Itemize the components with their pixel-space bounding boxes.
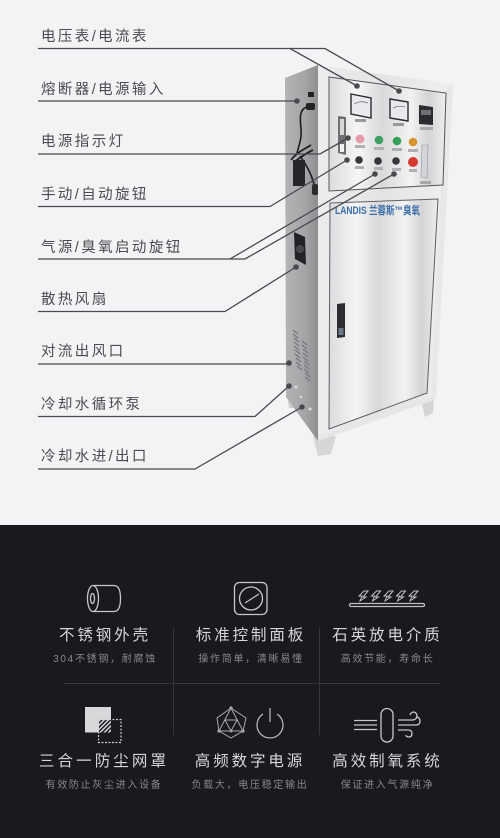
icon: gauge dial: [234, 582, 267, 614]
feature: high frequency power: [192, 706, 308, 791]
component labels: 气源/臭氧启动旋钮: [41, 239, 183, 256]
feature: quartz dielectric: 高效节能，寿命长: [341, 652, 434, 665]
component labels: 散热风扇: [41, 291, 109, 308]
feature: oxygen system: 保证进入气源纯净: [341, 778, 434, 791]
icon: polygon network: [217, 706, 246, 738]
component labels: 电压表/电流表: [41, 28, 149, 45]
side vents: [293, 330, 310, 381]
cabinet feet: [287, 395, 434, 456]
feature: high frequency power: 高频数字电源: [195, 752, 305, 770]
control panel: [329, 77, 446, 191]
callout dots: [286, 83, 402, 410]
feature: high frequency power: 负载大，电压稳定输出: [192, 778, 308, 791]
component labels: 冷却水进/出口: [41, 448, 149, 465]
feature: control panel: [196, 582, 306, 665]
feature: dust cover: [39, 707, 169, 791]
feature: control panel: 标准控制面板: [196, 626, 306, 644]
product: ozone generator cabinet: [285, 65, 453, 456]
cabinet door: [329, 199, 438, 429]
digital timer: [419, 105, 433, 130]
cabinet side panel: [285, 65, 318, 441]
component labels: 对流出风口: [41, 343, 126, 360]
indicator lights: [355, 134, 418, 152]
background: product area: [0, 0, 500, 525]
feature: stainless steel shell: 304不锈钢，耐腐蚀: [53, 652, 157, 665]
power cord and plug: [291, 107, 318, 195]
feature: control panel: 操作简单，清晰易懂: [198, 652, 304, 665]
cooling fan: [294, 232, 306, 265]
left flowmeter: [338, 116, 346, 155]
door handle: [337, 303, 345, 338]
panel: features dark section: [0, 525, 500, 838]
icon: steel roll: [88, 586, 120, 612]
component labels: 冷却水循环泵: [41, 396, 142, 413]
voltmeter: [351, 94, 371, 122]
icon: overlapping squares: [85, 707, 121, 742]
component labels: 电源指示灯: [41, 133, 126, 150]
feature: quartz dielectric: [332, 591, 443, 665]
feature: oxygen system: 高效制氧系统: [332, 752, 443, 770]
feature: stainless steel shell: 不锈钢外壳: [59, 626, 151, 644]
feature: dust cover: 有效防止灰尘进入设备: [46, 778, 162, 791]
feature: oxygen system: [332, 708, 443, 791]
cabinet front frame: [318, 65, 453, 441]
icon: power symbol: [257, 708, 283, 738]
icon: filter and wind: [354, 708, 420, 742]
rotary knobs: [355, 156, 418, 172]
right flowmeter: [420, 145, 431, 184]
feature: quartz dielectric: 石英放电介质: [332, 626, 443, 644]
icon: discharge bolts over plate: [350, 591, 424, 606]
side switches and socket: [306, 92, 315, 110]
component labels: 手动/自动旋钮: [41, 186, 149, 203]
brand logo: LANDIS 兰蓉斯™臭氧: [335, 203, 420, 217]
component labels: [41, 28, 183, 465]
feature: stainless steel shell: [53, 586, 157, 665]
callout lines: [38, 48, 399, 469]
door bottom edge: [318, 396, 434, 441]
component labels: 熔断器/电源输入: [41, 81, 166, 98]
dividers: [63, 628, 440, 735]
feature: dust cover: 三合一防尘网罩: [39, 752, 169, 770]
ammeter: [390, 99, 408, 126]
water fittings: [294, 386, 312, 410]
